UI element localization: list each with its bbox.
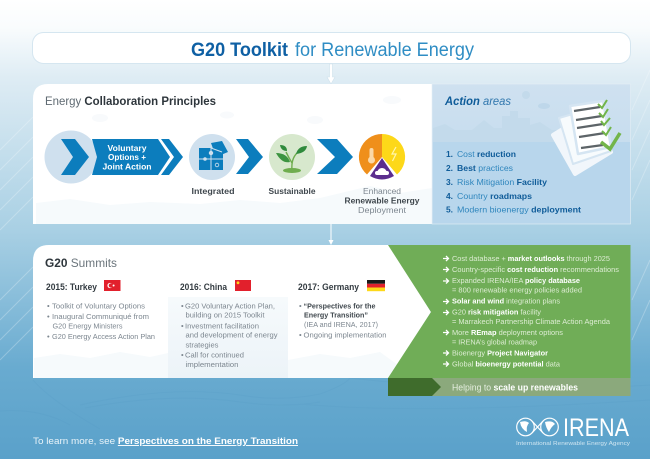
column: 2015 turkey: G20 Energy Access Action Plan <box>52 332 155 341</box>
list: outcomes: Country-specific cost reduction recommendations <box>452 265 619 274</box>
list: action areas: Risk Mitigation Facility <box>457 177 547 187</box>
label: enhanced renewable energy deployment <box>344 187 420 215</box>
flag: turkey <box>104 280 120 291</box>
column: 2017 germany: • <box>299 330 302 340</box>
column: 2016 china: 2016: China <box>180 282 228 293</box>
column: 2017 germany: (IEA and IRENA, 2017) <box>304 320 378 329</box>
banner: helping to scale up renewables <box>388 378 630 396</box>
column: 2016 china <box>180 280 278 369</box>
icon: puzzle integrated <box>189 134 235 180</box>
column: 2016 china: Call for continued <box>185 350 244 360</box>
list: outcomes: G20 risk mitigation facility <box>452 308 541 316</box>
list: action areas: 3. <box>446 177 453 187</box>
panel: energy collaboration principles <box>33 84 432 224</box>
column: 2015 turkey <box>46 280 155 341</box>
list: outcomes: Expanded IRENA/IEA policy database <box>452 276 580 285</box>
start circle with chevron <box>44 130 98 184</box>
list: action areas: Best practices <box>457 163 513 173</box>
column: 2016 china: building on 2015 Toolkit <box>186 310 265 320</box>
label: enhanced renewable energy deployment: Deployment <box>358 206 407 215</box>
heading: g20 summits: G20 Summits <box>45 256 117 270</box>
column: 2016 china: Investment facilitation <box>185 322 259 330</box>
list: action areas: Modern bioenergy deployment <box>457 204 581 214</box>
skyline background <box>36 96 432 224</box>
list: action areas: 5. <box>446 204 453 214</box>
label: integrated: Integrated <box>192 187 235 196</box>
chevron arrow <box>236 139 263 174</box>
list: outcomes: Solar and wind integration plans <box>452 296 560 306</box>
column: 2016 china: • <box>181 322 184 330</box>
list: action areas <box>446 149 581 214</box>
banner: voluntary options and joint action: Voluntary <box>108 144 147 153</box>
column: 2015 turkey: Toolkit of Voluntary Options <box>52 302 145 310</box>
column: 2015 turkey: • <box>47 312 50 321</box>
column: 2017 germany: “Perspectives for the <box>304 302 376 310</box>
column: 2016 china: implementation <box>186 360 238 369</box>
icon: checklist documents <box>553 100 620 174</box>
list: outcomes: = IRENA’s global roadmap <box>452 338 537 346</box>
title banner <box>32 32 630 64</box>
column: 2017 germany <box>298 280 386 340</box>
banner: voluntary options and joint action <box>92 139 183 175</box>
skyline background <box>34 297 398 378</box>
column: 2015 turkey: G20 Energy Ministers <box>52 322 123 330</box>
icon: sprout sustainable <box>269 134 315 180</box>
list: action areas: 4. <box>446 191 453 201</box>
column: 2015 turkey: • <box>47 302 50 310</box>
label: sustainable: Sustainable <box>268 187 316 196</box>
list: action areas: Cost reduction <box>457 149 516 159</box>
title banner: G20 Toolkit <box>191 40 289 61</box>
list: outcomes: = Marrakech Partnership Climate Action Agenda <box>452 317 611 326</box>
list: action areas: Country roadmaps <box>457 191 532 201</box>
arrow: principles to summits <box>328 224 334 245</box>
column: 2016 china: and development of energy <box>186 330 278 340</box>
panel: action areas <box>432 84 630 224</box>
banner: helping to scale up renewables: Helping to scale up renewables <box>452 382 578 392</box>
list: outcomes: Bioenergy Project Navigator <box>452 348 548 358</box>
list: outcomes: = 800 renewable energy policies added <box>452 286 582 294</box>
arrow: title to principles <box>327 64 335 84</box>
heading: action areas: Action areas <box>444 94 511 108</box>
logo: IRENA: International Renewable Energy Agency <box>516 441 630 447</box>
column: 2017 germany: • <box>299 302 302 310</box>
list: action areas: 1. <box>446 149 453 159</box>
column: 2015 turkey: Inaugural Communiqué from <box>52 312 149 321</box>
panel: g20 summits <box>33 245 431 378</box>
column: 2016 china: • <box>181 350 184 360</box>
heading: energy collaboration principles: Energy Collaboration Principles <box>45 94 216 108</box>
footer link text: To learn more, see Perspectives on the Energy Transition <box>33 436 298 447</box>
flag: china <box>235 280 251 291</box>
chevron arrow <box>317 139 353 174</box>
list: outcomes: Cost database + market outlooks through 2025 <box>452 254 610 263</box>
column: 2015 turkey: 2015: Turkey <box>46 282 98 293</box>
list: action areas: 2. <box>446 163 453 173</box>
icon: globes <box>517 418 558 436</box>
label: enhanced renewable energy deployment: Renewable Energy <box>344 196 420 206</box>
list: outcomes: Global bioenergy potential data <box>452 360 561 368</box>
logo: IRENA: IRENA <box>563 414 629 442</box>
column: 2016 china: • <box>181 302 184 310</box>
list: outcomes: More REmap deployment options <box>452 328 563 337</box>
banner: voluntary options and joint action: Joint Action <box>102 162 152 172</box>
banner: voluntary options and joint action: Options + <box>108 153 146 162</box>
label: enhanced renewable energy deployment: Enhanced <box>363 187 401 196</box>
column: 2017 germany: 2017: Germany <box>298 282 360 293</box>
logo: IRENA <box>516 414 630 447</box>
column: 2016 china: G20 Voluntary Action Plan, <box>185 302 275 310</box>
flag: germany <box>367 280 385 291</box>
list: outcomes <box>443 254 619 368</box>
column: 2017 germany: Ongoing implementation <box>304 330 386 340</box>
title banner: for Renewable Energy <box>295 40 474 61</box>
column: 2017 germany: Energy Transition” <box>304 310 368 320</box>
column: 2015 turkey: • <box>47 332 50 341</box>
panel: green outcomes <box>388 245 630 378</box>
column: 2016 china: strategies <box>186 340 219 350</box>
skyline background <box>433 91 630 224</box>
icon: energy pie <box>359 134 405 180</box>
